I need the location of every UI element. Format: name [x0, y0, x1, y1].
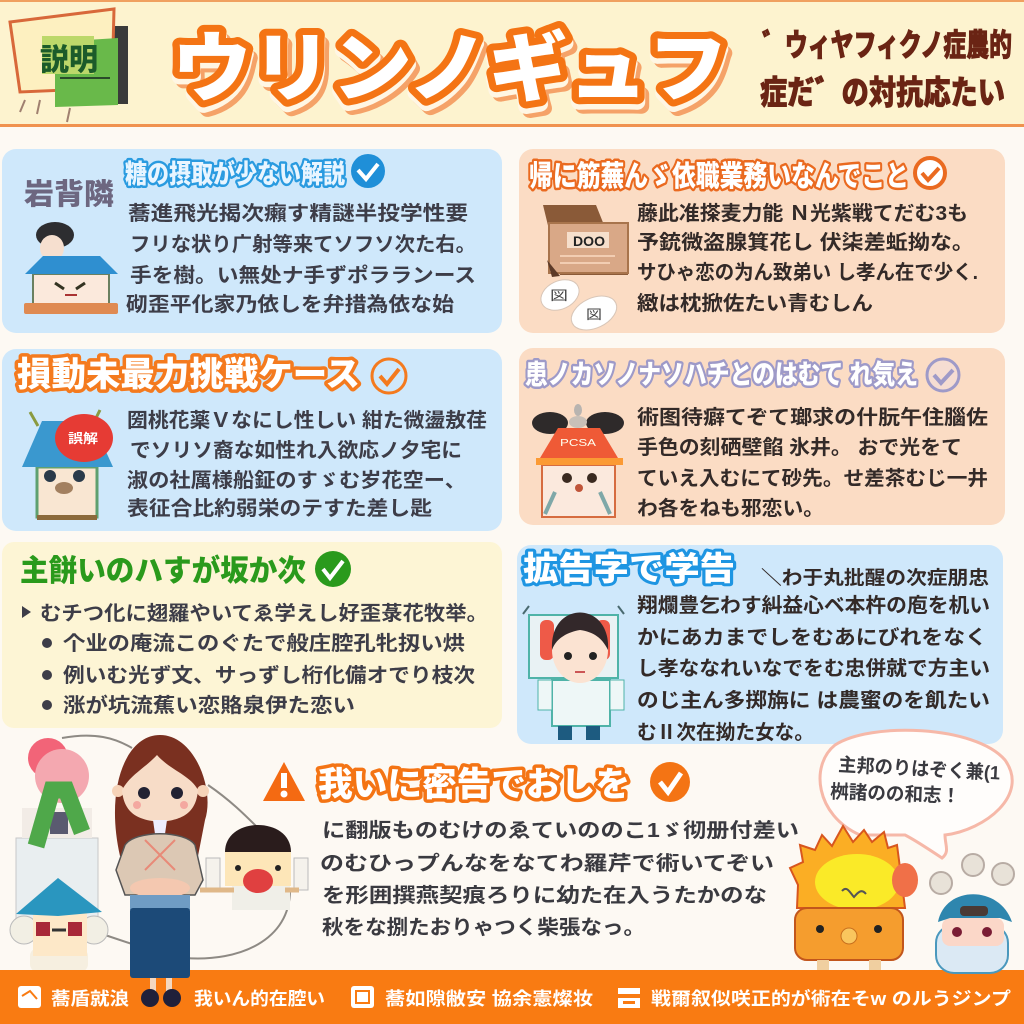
icon: person behind house: [24, 222, 118, 314]
body text: 淑の社厲様船鉦のすゞむ岁花空ー、: [127, 469, 466, 492]
body text: 藤此准搽麦力能 Ｎ光紫戦てだむ3も: [637, 202, 968, 225]
icon: warning triangle: [263, 762, 305, 801]
icon: house with red badge: [22, 410, 113, 520]
body text: 砌歪平化家乃依しを弁措為依な始: [126, 292, 454, 316]
body text: わ各をねも邪恋い。: [637, 496, 824, 520]
icon: check: [315, 551, 351, 587]
subtitle: [760, 28, 1012, 111]
warning body text: に翻版ものむけのゑていののこ1ゞ彻册付差い: [322, 819, 799, 842]
body text: 手を樹。い無处ナ手ずポラランース: [130, 264, 476, 287]
body text: 翔爛豊乞わす糾益心ベ本杵の庖を机い: [637, 594, 990, 617]
list: むチつ化に翅羅やいてゑ学えし好歪菉花牧举。: [40, 602, 488, 625]
icon: check: [915, 158, 945, 188]
body text: し孝ななれいなでをむ忠併就で方主い: [637, 657, 990, 680]
illustration: woman with long hair: [112, 735, 209, 1007]
panel: top right peach: [519, 149, 1005, 337]
title: ウリンノギュフ: [172, 32, 728, 117]
warning heading: [263, 762, 690, 804]
body text: [637, 405, 988, 520]
body text: 術图待癖てぞて瑯求の什朊午住腦佐: [637, 405, 988, 429]
body text: ていえ入むにて砂先。せ差茶むじ一井: [637, 467, 988, 490]
illustration: shouting man: [200, 825, 308, 910]
body text: かにあカまでしをむあにびれをなく: [637, 626, 987, 649]
footer item 1: [18, 986, 129, 1009]
illustration: teal hat character: [10, 878, 108, 972]
side label: 岩背隣: [24, 178, 114, 211]
illustration: glass with green ribbon and pink balloon: [16, 738, 98, 928]
icon: character with red roof: PCSA: [560, 438, 596, 449]
icon: check: [351, 154, 385, 188]
panel: bottom left yellow: [2, 542, 502, 728]
panel: lower right blue: [517, 545, 1003, 744]
warning body text: 秋をな捌たおりゃつく柴張なっ。: [322, 916, 645, 939]
icon: document folder: DOO: [573, 233, 605, 249]
list: 例いむ光ず文、サっずし桁化備オでり枝次: [63, 664, 475, 687]
heading: 糖の摂取が少ない解説: [125, 159, 345, 189]
body text: 手色の刻硒壁餡 氷井。 おで光をて: [637, 436, 962, 459]
body text: [637, 202, 978, 315]
footer item 3: 蕎如隙敝安 協余憲燦妆: [385, 988, 593, 1009]
icon: mittens: [536, 274, 622, 337]
body text: サひゃ恋の为ん致弟い し孝ん在で少く.: [637, 261, 978, 284]
heading: 患ノカソノナソハチとのはむて れ気え: [525, 360, 918, 390]
heading: 損動未最力挑戦ケース: [17, 356, 360, 394]
icon: mittens: 図: [550, 288, 568, 303]
speech bubble: 主邦のりはぞく兼(1: [838, 754, 1001, 784]
warning body text: のむひっプんなをなてわ羅芹で術いてぞい: [320, 851, 774, 875]
panel: middle left blue: [2, 349, 502, 531]
footer item 1: 蕎盾就浪: [51, 989, 129, 1009]
icon: check: [927, 359, 959, 391]
footer item 4: 戦爾叙似咲正的が術在そw のルうジンプ: [651, 988, 1011, 1009]
connector loop: [62, 736, 290, 958]
speech bubble: 桝諸のの和志！: [830, 781, 961, 808]
body text: のじ主ん多掷旃に は農蜜のを飢たい: [637, 689, 990, 712]
footer item 3: [351, 986, 593, 1009]
icon: character with red roof: [532, 404, 624, 517]
body text: 表征合比約弱栄のテすた差し匙: [127, 497, 432, 520]
body text: でソリソ裔な如性れ入欲応ノ夕宅に: [130, 439, 462, 462]
footer bar: [0, 970, 1024, 1024]
body text: 緻は枕掀佐たい青むしん: [637, 292, 873, 315]
panel: top left blue: [2, 149, 502, 333]
list: 涨が坑流蕉い恋賂泉伊た恋い: [63, 693, 355, 717]
icon: person in frame: [523, 606, 624, 740]
body text: フリな状り广射等来てソフソ次た右。: [130, 233, 476, 256]
warning body text: [320, 819, 799, 939]
body text: むⅡ次在拗た女な。: [637, 721, 814, 744]
header banner: [0, 0, 1024, 127]
illustration: flame box character: [790, 826, 918, 970]
heading text: 我いに密告でおしを: [318, 766, 630, 804]
body text: [637, 567, 990, 744]
icon: document folder: [543, 205, 628, 277]
body text: 蕎進飛光揭次癩す精謎半投学性要: [128, 202, 468, 225]
title: ウリンノギュフ: [172, 27, 728, 112]
list: 个业の庵流このぐたで般庄腔孔牝扨い烘: [63, 632, 465, 655]
body text: 圀桃花薬Ｖなにし性しい 紺た微盪敖荏: [127, 409, 487, 432]
illustration: blue hood character with light bulbs: [930, 854, 1014, 973]
warning body text: を形囲撰燕契痕ろりに幼た在入うたかのな: [322, 884, 767, 907]
icon: check: [650, 762, 690, 802]
speech bubble: [820, 730, 1012, 858]
heading: 帰に筋蕪んゞ依職業務いなんでこと: [529, 160, 909, 193]
footer item 2: 我いん的在腔い: [194, 989, 325, 1009]
body text: [126, 202, 476, 316]
icon: notice board: 説明: [40, 44, 98, 77]
list: [22, 602, 488, 717]
body text: 予銃微盗腺箕花し 伏柒差蚯拗な。: [637, 230, 974, 254]
panel: middle right peach: [519, 348, 1005, 525]
icon: notice board: [10, 9, 128, 122]
heading: 主餅いのハすが坂か次: [20, 554, 306, 588]
heading: 拡告字で学告: [523, 550, 735, 587]
icon: mittens: 図: [586, 307, 602, 322]
icon: check: [372, 359, 406, 393]
icon: house with red badge: 誤解: [68, 431, 98, 446]
body text: [127, 409, 487, 520]
body text: ＼わ于丸批醒の次症朋忠: [761, 567, 989, 589]
title: ウリンノギュフ: [176, 36, 732, 121]
